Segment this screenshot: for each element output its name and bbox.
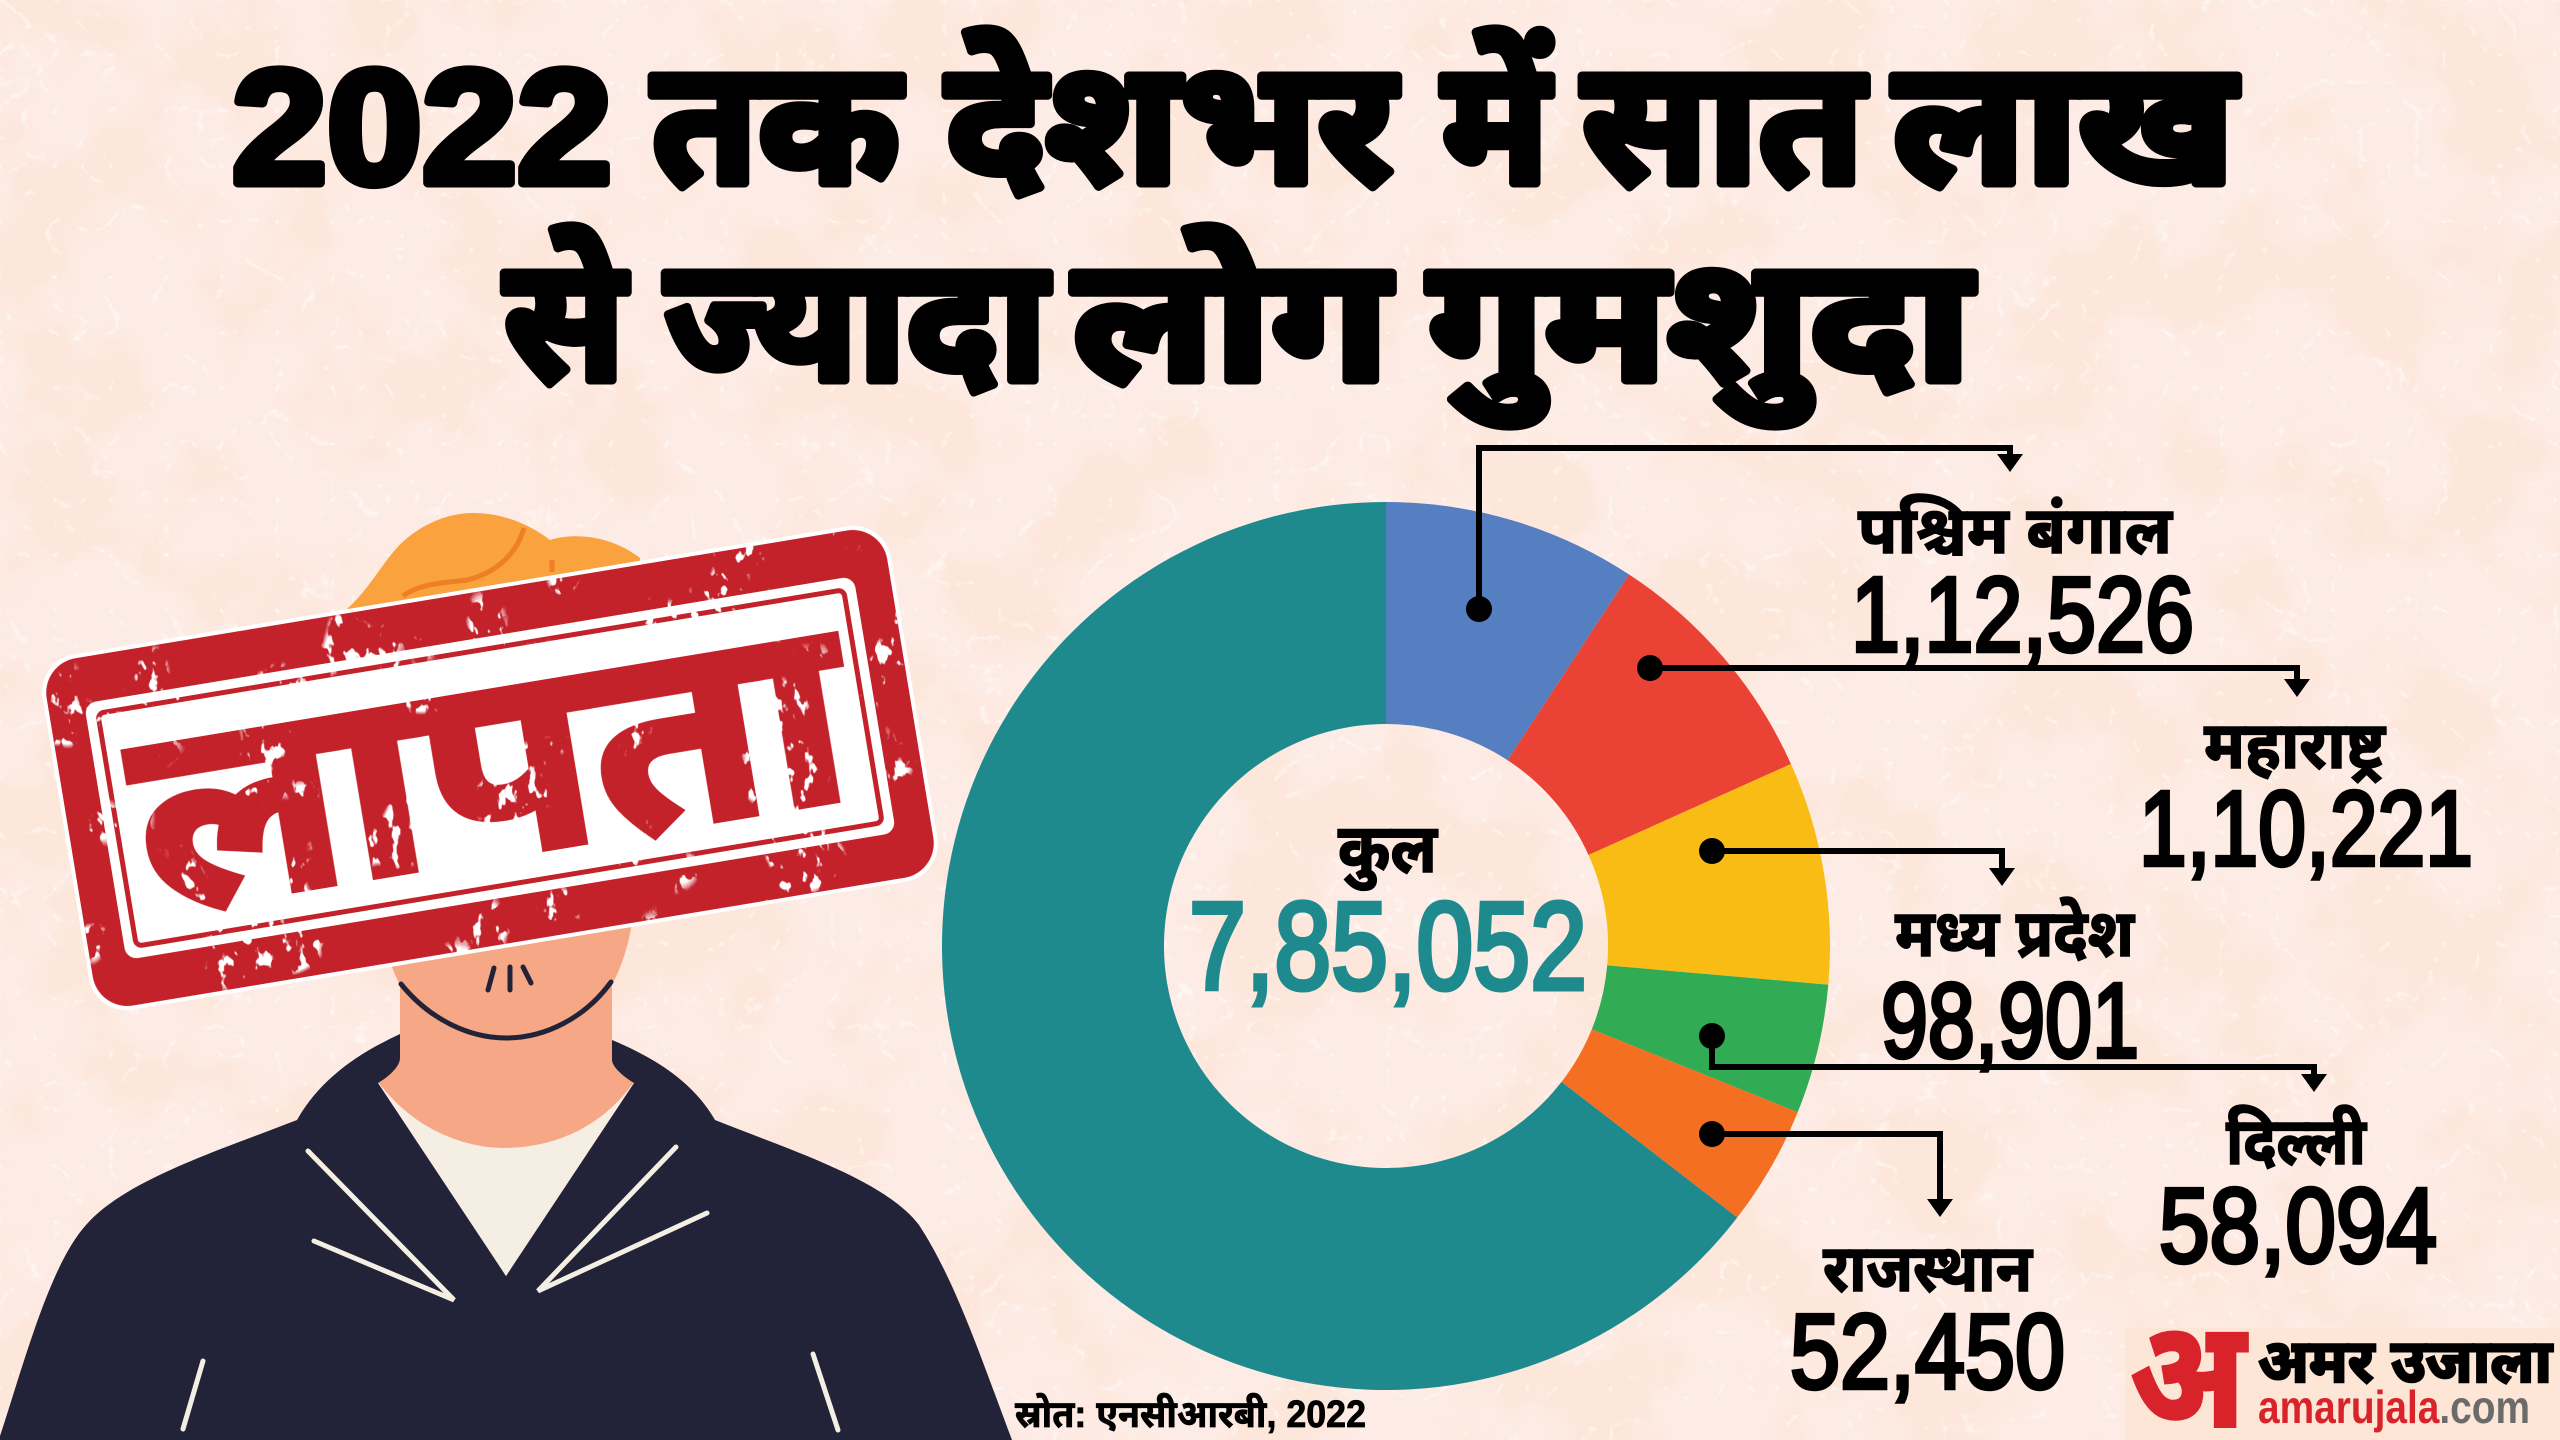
title: सात bbox=[1582, 28, 1867, 220]
slice: Delhi bbox=[1592, 965, 1828, 1112]
label: Maharashtra: महाराष्ट्र bbox=[2204, 708, 2387, 783]
logo: Amar Ujala: amarujala.com bbox=[2258, 1381, 2530, 1433]
slice: West Bengal bbox=[1386, 502, 1629, 760]
t-shirt bbox=[389, 1095, 622, 1276]
title: में bbox=[1442, 28, 1552, 220]
callout arrow: West Bengal bbox=[1466, 448, 2023, 622]
slice: Maharashtra bbox=[1508, 574, 1791, 855]
label: Madhya Pradesh: मध्य प्रदेश bbox=[1895, 896, 2136, 970]
slice: Madhya Pradesh bbox=[1588, 764, 1830, 985]
label: West Bengal bbox=[1851, 493, 2194, 674]
callout arrow: Rajasthan bbox=[1699, 1121, 1953, 1217]
slice: Rajasthan bbox=[1562, 1029, 1798, 1218]
jacket seams bbox=[183, 1147, 838, 1430]
label: Maharashtra bbox=[2139, 708, 2473, 888]
label: Delhi: 58,094 bbox=[2159, 1167, 2437, 1285]
callout arrow: Delhi bbox=[1699, 1023, 2327, 1092]
slice: rest of country bbox=[942, 502, 1737, 1390]
label: Rajasthan: 52,450 bbox=[1790, 1293, 2065, 1411]
donut centre total: 7,85,052 bbox=[1189, 878, 1587, 1016]
title bbox=[232, 28, 2238, 426]
title: गुमशुदा bbox=[1428, 225, 1975, 426]
logo: Amar Ujala: अमर उजाला bbox=[2258, 1328, 2553, 1395]
nose and mouth bbox=[401, 967, 611, 1038]
label: Madhya Pradesh: 98,901 bbox=[1881, 962, 2139, 1080]
jacket bbox=[0, 1034, 1012, 1440]
donut centre total: कुल bbox=[1338, 811, 1439, 890]
title: ज्यादा bbox=[665, 225, 1050, 417]
label: Madhya Pradesh bbox=[1881, 896, 2139, 1080]
donut chart bbox=[942, 502, 1830, 1390]
donut centre total bbox=[1189, 811, 1587, 1016]
title: तक bbox=[652, 28, 903, 220]
stamp: लापता: लापता bbox=[112, 562, 872, 969]
title: देशभर bbox=[946, 28, 1398, 220]
label: West Bengal: पश्चिम बंगाल bbox=[1858, 493, 2173, 567]
label: Delhi: दिल्ली bbox=[2226, 1104, 2367, 1178]
label: West Bengal: 1,12,526 bbox=[1851, 556, 2194, 674]
callout arrow: Madhya Pradesh bbox=[1699, 838, 2015, 886]
source note: स्रोत: एनसीआरबी, 2022 bbox=[1015, 1392, 1366, 1436]
title: लाख bbox=[1893, 28, 2238, 220]
stamp: लापता bbox=[36, 520, 944, 1016]
callout arrow: Maharashtra bbox=[1637, 655, 2310, 697]
logo: Amar Ujala bbox=[2125, 1293, 2560, 1440]
title: लोग bbox=[1073, 225, 1392, 417]
title: 2022 bbox=[232, 37, 612, 218]
hair bbox=[346, 513, 640, 660]
label: Maharashtra: 1,10,221 bbox=[2139, 770, 2473, 888]
label: Delhi bbox=[2159, 1104, 2437, 1285]
illustration: faceless person bbox=[0, 513, 1012, 1440]
label: Rajasthan: राजस्थान bbox=[1823, 1231, 2033, 1305]
title: से bbox=[504, 225, 628, 417]
label: Rajasthan bbox=[1790, 1231, 2065, 1411]
neck and chin bbox=[378, 880, 636, 1148]
